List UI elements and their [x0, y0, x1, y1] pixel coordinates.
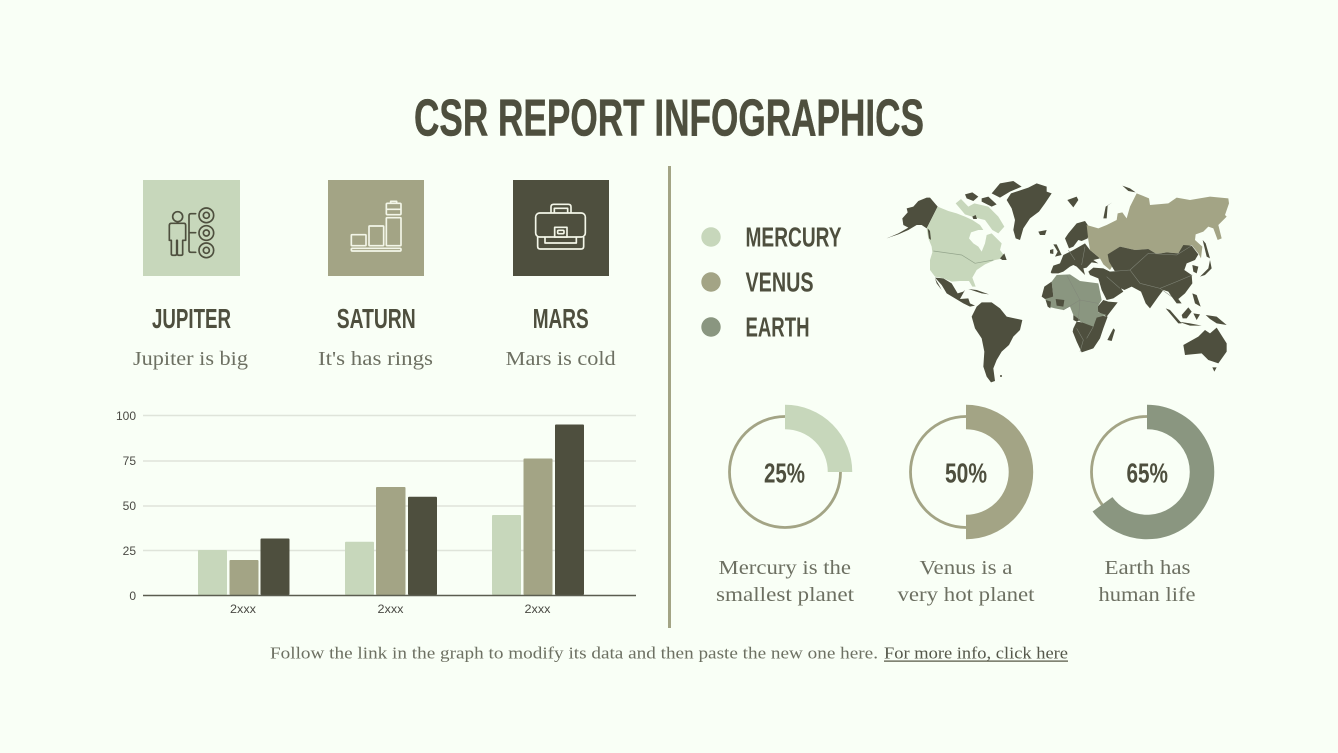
legend item: Earth: [701, 312, 810, 342]
y axis labels: 0: [129, 589, 136, 603]
text: Jupiter description: Jupiter is big: [133, 348, 248, 370]
caption: [716, 557, 854, 606]
legend item: Mercury: [701, 222, 842, 252]
y axis labels: [116, 409, 136, 603]
map: Eurasia, Africa and Oceania: [1042, 186, 1229, 372]
legend item: Venus: [701, 266, 814, 298]
y axis labels: 50: [123, 499, 136, 513]
caption: Earth has: [1104, 557, 1191, 579]
heading: Mars: MARS: [533, 303, 589, 334]
legend item: Mercury: MERCURY: [746, 222, 842, 252]
x axis labels: 2xxx: [378, 602, 404, 616]
text: Mars description: Mars is cold: [506, 348, 616, 370]
x axis labels: 2xxx: [230, 602, 256, 616]
footer note: Follow the link in the graph to modify its data and then paste the new one here.: [270, 644, 878, 662]
heading: Jupiter: JUPITER: [152, 303, 231, 334]
footer note: [270, 644, 1068, 662]
y axis labels: 25: [123, 544, 136, 558]
donut: 25%: [730, 416, 840, 528]
bars: group 3: [492, 424, 584, 595]
caption: [898, 557, 1035, 606]
donut: 65%: [1092, 416, 1202, 528]
donut: 50%: [910, 416, 1022, 528]
world map: [887, 181, 1229, 382]
footer link: For more info, click here: [884, 644, 1068, 662]
panel: donut stats: [716, 416, 1202, 606]
heading: Saturn: SATURN: [337, 303, 416, 334]
legend item: Earth: EARTH: [746, 312, 810, 342]
icon: bar growth: [328, 180, 424, 276]
y axis labels: 100: [116, 409, 136, 423]
x axis labels: [230, 602, 550, 616]
panel: planets with icons: [133, 180, 616, 370]
caption: very hot planet: [898, 584, 1035, 606]
value: 65%: [1126, 458, 1168, 488]
legend: [701, 222, 842, 342]
caption: Mercury is the: [718, 557, 851, 579]
value: 25%: [764, 458, 805, 488]
map: Americas and Greenland: [887, 181, 1052, 382]
icon: person with targets: [143, 180, 240, 276]
caption: human life: [1098, 584, 1196, 606]
stat: Earth 65%: [1092, 416, 1202, 606]
card: Mars: [506, 180, 616, 370]
bar chart: [116, 409, 636, 616]
stat: Venus 50%: [898, 416, 1035, 606]
divider: [668, 166, 671, 628]
stat: Mercury 25%: [716, 416, 854, 606]
text: Saturn description: It's has rings: [318, 348, 433, 370]
value: 50%: [945, 458, 987, 488]
caption: smallest planet: [716, 584, 854, 606]
card: Jupiter: [133, 180, 248, 370]
bars: group 1: [198, 538, 290, 595]
caption: Venus is a: [920, 557, 1012, 579]
y axis labels: 75: [123, 454, 136, 468]
title: CSR REPORT INFOGRAPHICS: [414, 90, 924, 148]
x axis labels: 2xxx: [524, 602, 550, 616]
caption: [1098, 557, 1196, 606]
legend item: Venus: VENUS: [746, 266, 814, 298]
icon: briefcase: [513, 180, 609, 276]
card: Saturn: [318, 180, 433, 370]
bars: group 2: [345, 487, 437, 595]
